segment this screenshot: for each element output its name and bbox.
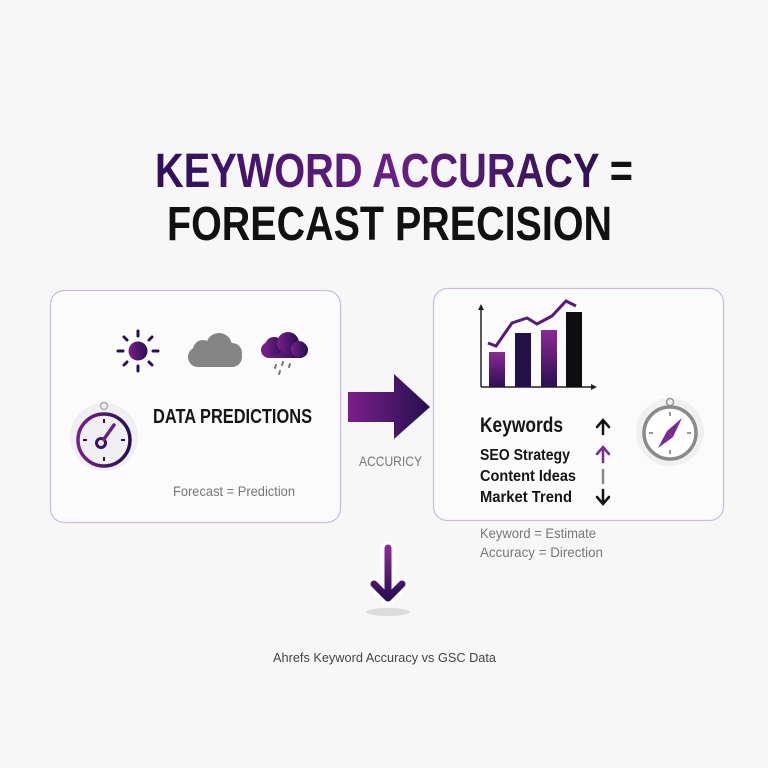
title: KEYWORD ACCURACY =	[155, 145, 633, 198]
heading: data predictions: DATA PREDICTIONS	[153, 406, 312, 428]
list: keywords: Market Trend	[480, 489, 572, 506]
panel: keywords	[434, 288, 724, 520]
bar chart	[478, 301, 597, 390]
footer text: Ahrefs Keyword Accuracy vs GSC Data	[273, 650, 497, 665]
icon: rain cloud	[261, 332, 308, 374]
label: accuricy: ACCURICY	[359, 453, 423, 469]
caption: keyword estimate: Keyword = Estimate	[480, 525, 596, 541]
icon: compass	[636, 398, 704, 466]
list: keywords: Keywords	[480, 414, 563, 437]
caption: forecast: Forecast = Prediction	[173, 483, 295, 499]
icon: sun	[118, 331, 158, 371]
list: keywords	[480, 414, 576, 506]
icon: direction arrows	[597, 420, 609, 504]
arrow: down	[366, 548, 410, 616]
list: keywords: SEO Strategy	[480, 447, 570, 464]
panel: data predictions	[50, 290, 340, 522]
icon: stopwatch	[70, 402, 138, 471]
arrow: right	[348, 374, 430, 439]
caption: keyword estimate	[480, 525, 603, 560]
list: keywords: Content Ideas	[480, 468, 576, 485]
title	[155, 145, 633, 251]
icon: cloud	[188, 333, 242, 367]
title: FORECAST PRECISION	[167, 198, 612, 251]
caption: keyword estimate: Accuracy = Direction	[480, 544, 603, 560]
